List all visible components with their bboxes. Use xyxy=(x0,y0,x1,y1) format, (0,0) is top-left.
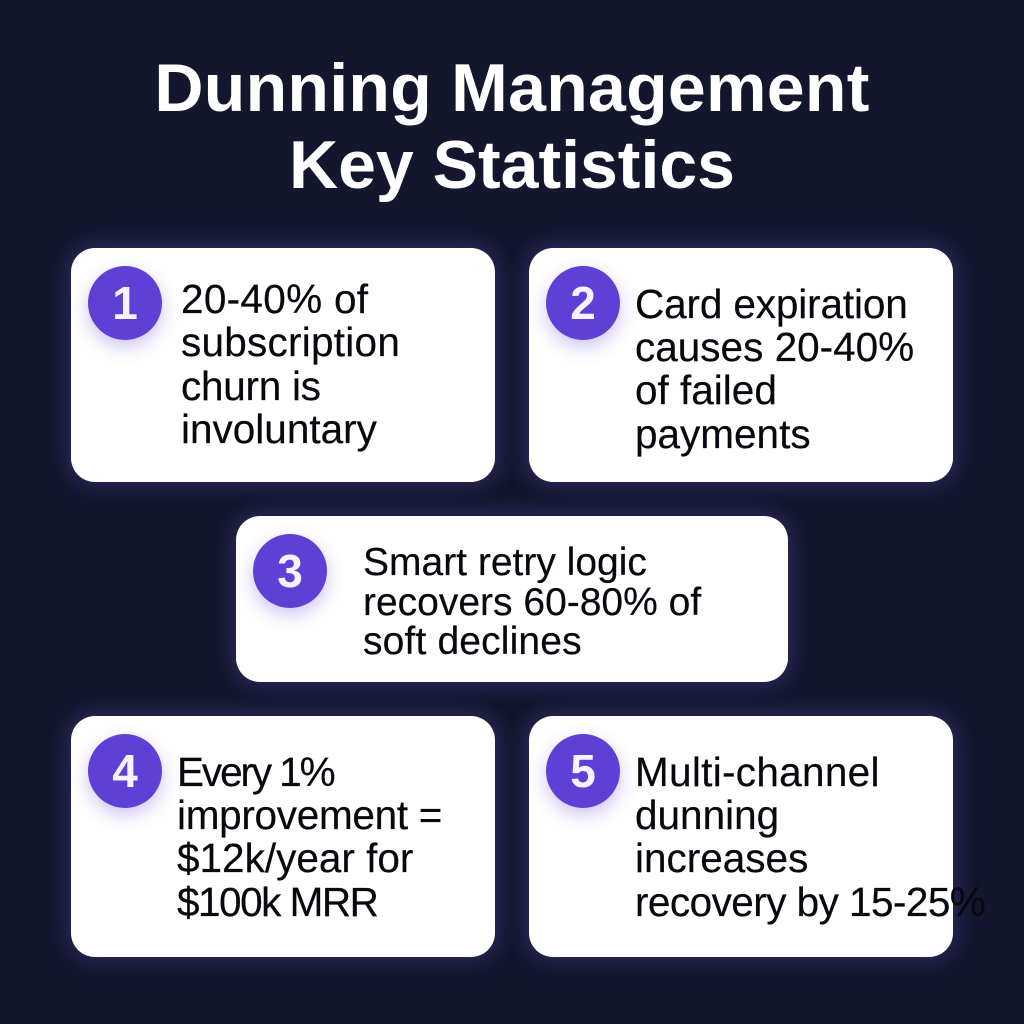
text: stat 2: causes 20-40% xyxy=(635,324,914,370)
panel: stat 5 xyxy=(529,716,953,957)
text: stat 4: improvement = xyxy=(177,792,442,838)
text: stat 5: increases xyxy=(635,835,808,881)
text: stat 3: Smart retry logic xyxy=(363,541,647,584)
panel: stat 3 xyxy=(236,516,788,682)
panel: stat 1 xyxy=(71,248,495,482)
icon: number 4: 4 xyxy=(112,745,138,797)
text: stat 1: 20-40% of xyxy=(181,276,368,322)
title: Dunning Management xyxy=(154,50,870,126)
text: stat 1 xyxy=(181,276,400,452)
text: stat 4 xyxy=(177,748,442,925)
icon: number 3 xyxy=(253,534,327,608)
icon: number 1: 1 xyxy=(112,277,138,329)
text: stat 4: Every 1% xyxy=(177,748,334,794)
text: stat 3: recovers 60-80% of xyxy=(363,580,701,624)
text: stat 5 xyxy=(635,748,985,925)
text: stat 3: soft declines xyxy=(363,620,582,663)
text: stat 2: Card expiration xyxy=(635,280,908,326)
icon: number 3: 3 xyxy=(277,544,303,596)
text: stat 4: $100k MRR xyxy=(177,879,377,925)
panel: stat 4 xyxy=(71,716,495,957)
icon: number 2: 2 xyxy=(570,277,596,329)
text: stat 5: recovery by 15-25% xyxy=(635,879,985,925)
text: stat 2: payments xyxy=(635,411,811,457)
text: stat 2 xyxy=(635,280,914,457)
title xyxy=(154,50,870,202)
icon: number 5 xyxy=(546,734,620,808)
text: stat 1: subscription xyxy=(181,319,400,365)
icon: number 1 xyxy=(88,266,162,340)
icon: number 4 xyxy=(88,734,162,808)
text: stat 1: involuntary xyxy=(181,406,377,452)
icon: number 2 xyxy=(546,266,620,340)
title: Key Statistics xyxy=(289,126,735,202)
text: stat 2: of failed xyxy=(635,367,777,413)
text: stat 5: Multi-channel xyxy=(635,748,880,794)
text: stat 3 xyxy=(363,541,702,663)
panel: stat 2 xyxy=(529,248,953,482)
text: stat 4: $12k/year for xyxy=(177,835,413,881)
icon: number 5: 5 xyxy=(570,745,596,797)
text: stat 1: churn is xyxy=(181,363,321,409)
text: stat 5: dunning xyxy=(635,792,779,838)
